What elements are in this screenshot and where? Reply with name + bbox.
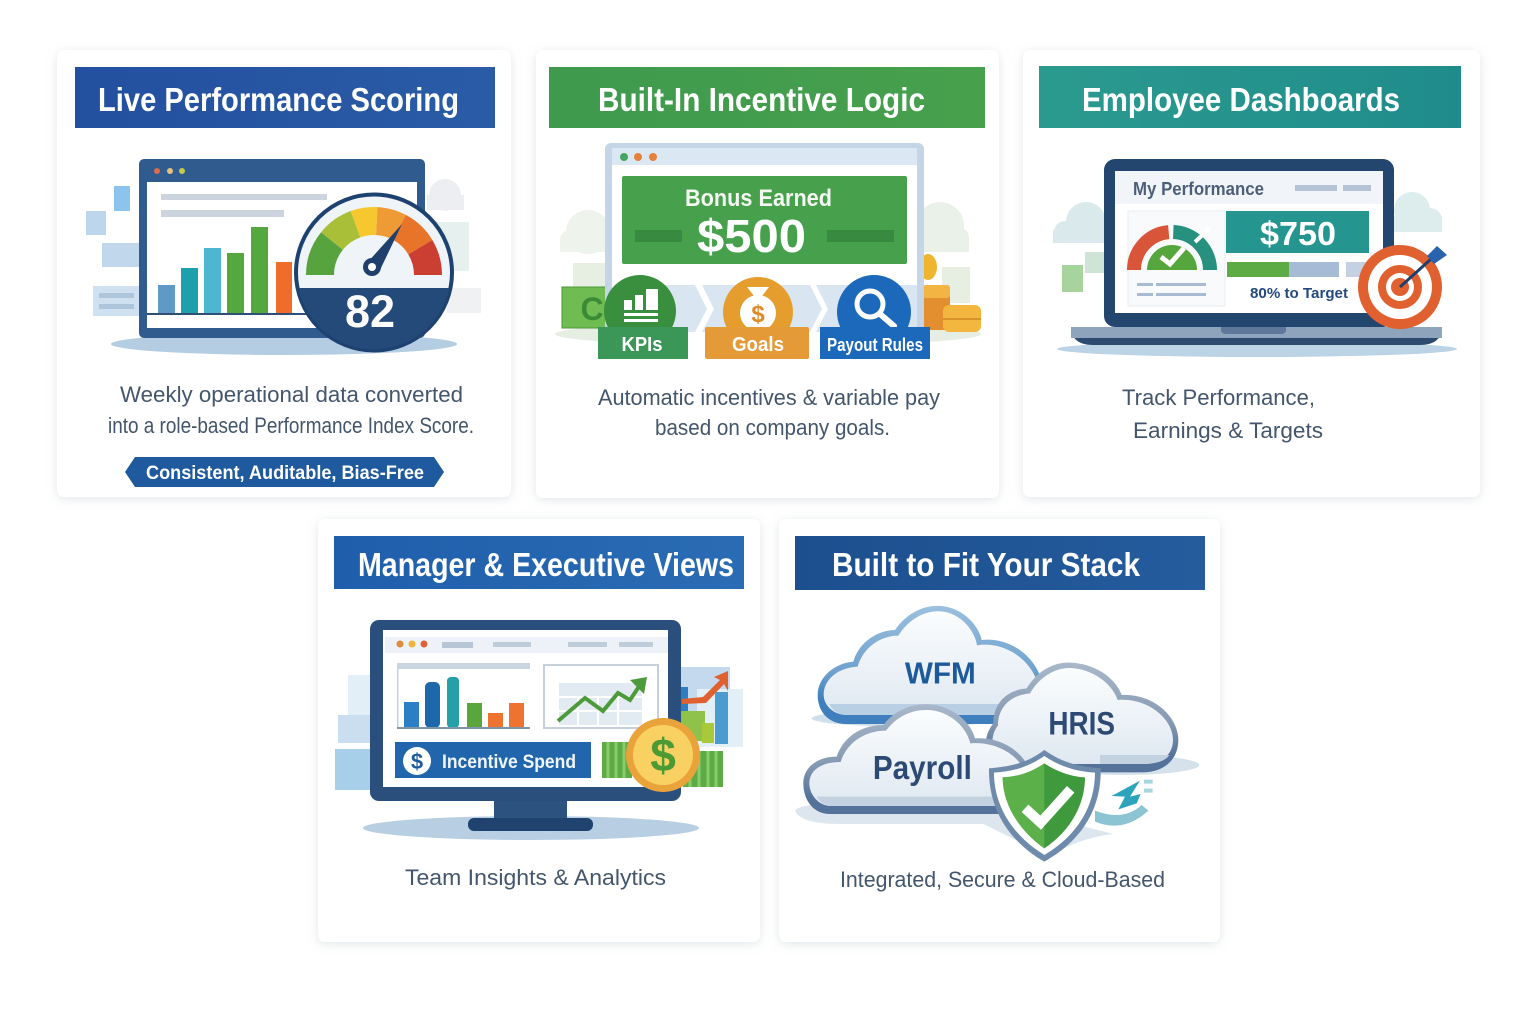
heading: Manager & Executive Views: [334, 536, 744, 589]
description: [108, 382, 474, 438]
icon: connector gear: [1095, 781, 1153, 826]
panel: Built-In Incentive Logic: [536, 50, 999, 498]
icon: cash: [562, 287, 608, 328]
panel: Manager & Executive Views: [318, 519, 760, 942]
description: Track Performance,: [1122, 385, 1315, 410]
bar chart: [147, 227, 317, 315]
icon: Goals: Goals: [732, 334, 784, 356]
chevrons: [640, 285, 917, 332]
cloud: WFM: WFM: [905, 656, 976, 690]
icon: Goals: [705, 277, 809, 359]
description: Team Insights & Analytics: [405, 865, 666, 890]
heading: Built-In Incentive Logic: Built-In Incentive Logic: [598, 81, 925, 118]
description: [1122, 385, 1323, 443]
panel: Employee Dashboards: [1023, 50, 1480, 497]
icon: score gauge: [296, 194, 452, 350]
description: Earnings & Targets: [1133, 418, 1323, 443]
cloud: HRIS: [986, 663, 1178, 772]
description: based on company goals.: [655, 415, 890, 440]
banner: Incentive Spend: $: [411, 749, 423, 774]
description: Integrated, Secure & Cloud-Based: [840, 867, 1165, 892]
icon: dollar coin: [626, 718, 700, 792]
cloud: Payroll: [803, 704, 1028, 814]
illustration: dashboard window with score gauge: [86, 159, 481, 355]
heading: Built to Fit Your Stack: [795, 536, 1205, 590]
icon: KPIs: [598, 275, 688, 359]
illustration: laptop dashboard: [1053, 159, 1457, 357]
callout: Consistent, Auditable, Bias-Free: Consistent, Auditable, Bias-Free: [146, 463, 424, 484]
icon: security shield: [989, 750, 1101, 862]
callout: Consistent, Auditable, Bias-Free: [125, 457, 444, 487]
description: Weekly operational data converted: [120, 382, 463, 407]
icon: Goals: $: [751, 301, 765, 328]
icon: small gauge: [1128, 211, 1225, 306]
description: Automatic incentives & variable pay: [598, 385, 940, 410]
banner: Bonus Earned $500: Bonus Earned: [685, 185, 832, 212]
line chart: [544, 665, 658, 728]
banner: Incentive Spend: Incentive Spend: [442, 752, 576, 773]
amount: $750: [1226, 211, 1369, 253]
icon: Payout Rules: Payout Rules: [827, 335, 923, 355]
heading: Built-In Incentive Logic: [549, 67, 985, 128]
icon: target with dart: [1358, 245, 1447, 329]
description: into a role-based Performance Index Score.: [108, 413, 474, 438]
banner: Bonus Earned $500: $500: [697, 210, 806, 262]
illustration: clouds and shield: [795, 606, 1199, 862]
icon: cash: C: [580, 291, 604, 327]
cloud: HRIS: HRIS: [1048, 705, 1115, 741]
cloud: WFM: [818, 606, 1042, 724]
illustration: monitor dashboard: [335, 620, 743, 840]
banner: Bonus Earned $500: [622, 176, 907, 264]
banner: Incentive Spend: [395, 742, 591, 778]
icon: KPIs: KPIs: [622, 334, 662, 356]
text: 80% to Target: 80% to Target: [1250, 285, 1348, 302]
icon: cash stripes: [602, 742, 723, 787]
panel: Built to Fit Your Stack: [779, 519, 1220, 942]
browser window: [139, 159, 425, 338]
text: My Performance: My Performance: [1133, 179, 1264, 199]
bar chart: [397, 663, 530, 729]
heading: Live Performance Scoring: Live Performance Scoring: [98, 81, 459, 118]
heading: Built to Fit Your Stack: Built to Fit Your Stack: [832, 546, 1141, 583]
icon: dollar coin: $: [650, 729, 676, 781]
panel: Live Performance Scoring: [57, 50, 511, 497]
background chart with arrow: [681, 667, 743, 747]
laptop: [1071, 159, 1442, 345]
monitor: [370, 620, 681, 831]
heading: Employee Dashboards: [1039, 66, 1461, 128]
illustration: bonus window: [555, 143, 981, 359]
heading: Employee Dashboards: Employee Dashboards: [1082, 81, 1400, 118]
amount: $750: $750: [1260, 215, 1336, 252]
progress bar: [1227, 262, 1370, 277]
icon: Payout Rules: [820, 275, 930, 359]
icon: coins: [919, 254, 981, 332]
heading: Manager & Executive Views: Manager & Executive Views: [358, 546, 734, 583]
description: [598, 385, 940, 440]
icon: score gauge: 82: [345, 286, 395, 337]
cloud: Payroll: Payroll: [873, 750, 972, 787]
window: [605, 143, 924, 355]
heading: Live Performance Scoring: [75, 67, 495, 128]
